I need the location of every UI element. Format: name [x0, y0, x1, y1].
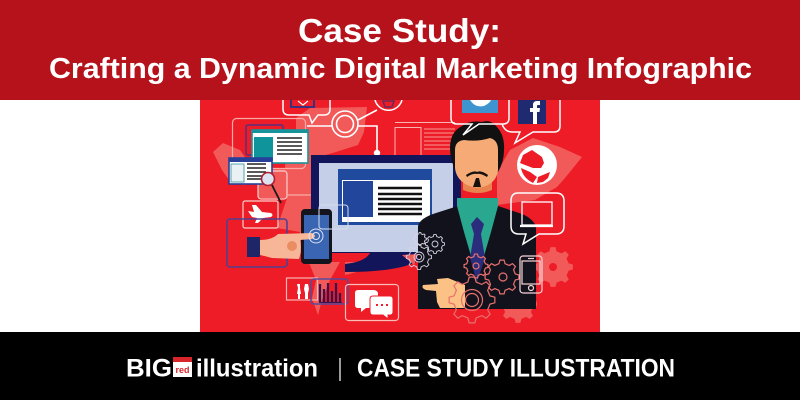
small white gears on monitor — [402, 233, 444, 269]
icon: twitter bubble — [451, 100, 509, 135]
logo: BIG red illustration: red — [175, 365, 190, 375]
icon: teal web page window — [246, 125, 308, 163]
collar shadow — [463, 198, 492, 216]
icon: chat bubbles — [346, 284, 398, 320]
world map silhouette — [213, 107, 582, 315]
header banner — [0, 0, 800, 100]
icon: chat bubble with envelope — [283, 100, 330, 123]
suit — [418, 206, 536, 309]
man character — [418, 121, 536, 309]
icon: target circle with connectors — [307, 110, 380, 156]
monitor — [311, 155, 461, 272]
icon: airplane — [248, 205, 272, 223]
browser window outlines — [232, 118, 312, 228]
tie — [470, 217, 485, 282]
separator — [339, 358, 341, 381]
icon: shopping cart circle — [375, 100, 402, 110]
moustache and goatee — [466, 171, 488, 187]
shirt collar — [457, 198, 498, 256]
icon: people sign — [286, 278, 318, 300]
title line 2: Crafting a Dynamic Digital Marketing Infographic — [49, 53, 752, 85]
pink background gears — [499, 247, 573, 323]
gears icon group — [449, 254, 519, 323]
face — [455, 138, 498, 188]
icon: globe — [517, 145, 557, 185]
footer label: CASE STUDY ILLUSTRATION — [357, 354, 675, 382]
logo: BIG red illustration — [126, 354, 318, 382]
hand frame — [227, 219, 287, 267]
icon: laptop speech bubble — [511, 193, 564, 244]
pointing hand — [422, 278, 465, 308]
hair — [450, 121, 504, 172]
icon: phone outline — [520, 256, 542, 293]
title line 1: Case Study: — [298, 12, 501, 49]
panel: red illustration — [200, 100, 600, 332]
icon: magnifying glass — [262, 172, 281, 203]
neck shadow — [463, 178, 492, 193]
icon: smartphone — [301, 205, 348, 264]
logo: BIG red illustration: BIG — [126, 354, 172, 382]
icon: facebook bubble — [502, 100, 560, 143]
footer bar — [0, 332, 800, 400]
article card outline — [395, 122, 455, 157]
bar chart icon — [311, 279, 348, 304]
icon: small blue web page window — [229, 158, 272, 184]
logo: BIG red illustration: illustration — [196, 354, 318, 382]
icon: pointing hand on phone — [247, 229, 323, 259]
